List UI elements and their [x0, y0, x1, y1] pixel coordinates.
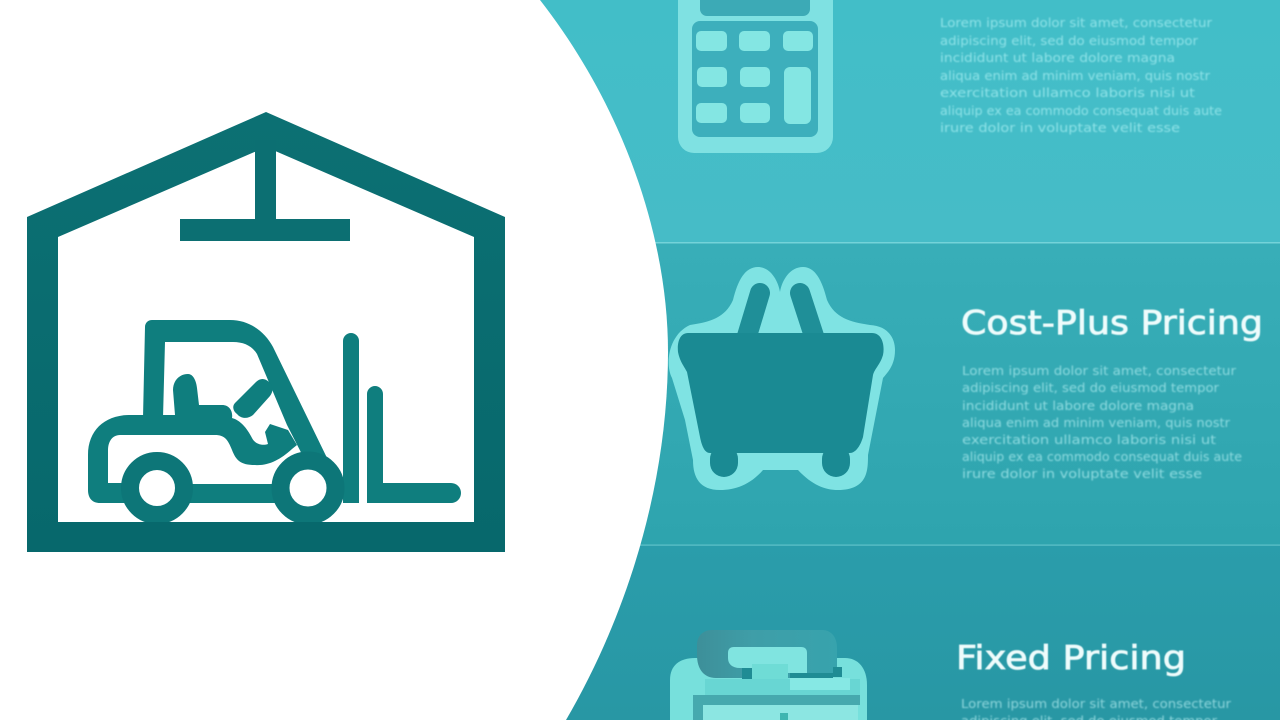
text block: top pricing description: aliqua enim ad minim veniam, quis nostr — [940, 69, 1210, 83]
basket fill — [678, 333, 884, 453]
panel: top pricing band — [500, 0, 1280, 243]
forklift body and seat — [88, 374, 297, 503]
text block: fixed pricing description: Lorem ipsum dolor sit amet, consectetur — [961, 697, 1231, 711]
text block: top pricing description: irure dolor in voluptate velit esse — [940, 121, 1180, 135]
register notches — [742, 667, 842, 680]
warehouse frame — [27, 112, 505, 552]
panel: cost-plus pricing band — [500, 243, 1280, 545]
text block: cost-plus description — [962, 364, 1242, 481]
heading: Fixed Pricing: Fixed Pricing — [956, 638, 1186, 677]
forklift mast — [343, 333, 359, 503]
text block: top pricing description: exercitation ullamco laboris nisi ut — [940, 86, 1195, 100]
warehouse floor — [58, 522, 474, 552]
calculator body — [678, 0, 833, 153]
register handset — [697, 630, 837, 678]
forklift rear wheel — [130, 461, 184, 515]
text block: top pricing description: adipiscing elit, sed do eiusmod tempor — [940, 34, 1198, 48]
register display — [728, 647, 807, 680]
text block: top pricing description: aliquip ex ea commodo consequat duis aute — [940, 104, 1222, 118]
panel: white circular area — [0, 0, 668, 720]
register drawer handle — [780, 713, 788, 720]
icon: warehouse with forklift — [27, 112, 505, 552]
register body — [670, 658, 867, 720]
register drawer panel — [703, 705, 858, 720]
text block: top pricing description: incididunt ut labore dolore magna — [940, 51, 1175, 65]
basket handles — [747, 293, 814, 336]
text block: cost-plus description: adipiscing elit, sed do eiusmod tempor — [962, 381, 1219, 395]
basket outline — [669, 267, 895, 490]
forklift — [88, 320, 461, 503]
icon: cash register — [670, 630, 867, 720]
text block: cost-plus description: irure dolor in voluptate velit esse — [962, 467, 1202, 481]
band divider bottom — [500, 544, 1280, 546]
calculator keypad — [692, 21, 818, 137]
text block: cost-plus description: Lorem ipsum dolor sit amet, consectetur — [962, 364, 1236, 378]
text block: cost-plus description: incididunt ut labore dolore magna — [962, 399, 1194, 413]
text block: cost-plus description: aliquip ex ea commodo consequat duis aute — [962, 450, 1242, 464]
icon: calculator — [678, 0, 833, 153]
text block: cost-plus description: aliqua enim ad minim veniam, quis nostr — [962, 416, 1230, 430]
text block: cost-plus description: exercitation ullamco laboris nisi ut — [962, 433, 1216, 447]
basket feet — [710, 445, 738, 477]
panel: fixed pricing band — [500, 545, 1280, 720]
calculator keys — [696, 31, 813, 124]
register counter strip — [705, 679, 860, 697]
text block: fixed pricing description — [961, 697, 1231, 720]
forklift front wheel — [280, 460, 336, 516]
calculator screen — [700, 0, 810, 16]
register drawer frame — [693, 695, 860, 720]
warehouse ceiling hoist — [180, 140, 350, 241]
forklift chassis — [180, 484, 285, 503]
text block: top pricing description: Lorem ipsum dolor sit amet, consectetur — [940, 16, 1212, 30]
forklift cab — [143, 320, 329, 470]
forklift fork — [367, 386, 461, 503]
band divider top — [500, 242, 1280, 244]
icon: shopping basket — [669, 267, 895, 490]
text block: top pricing description — [940, 16, 1222, 135]
heading: Cost-Plus Pricing: Cost-Plus Pricing — [961, 303, 1263, 342]
forklift steering — [233, 379, 272, 418]
